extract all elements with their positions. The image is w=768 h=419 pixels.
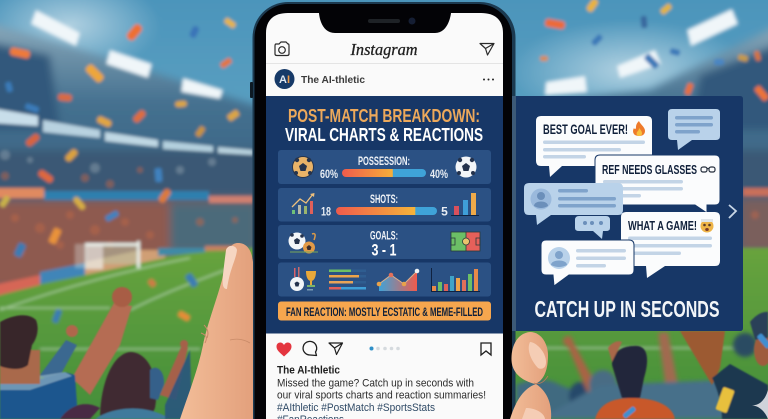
instagram header (275, 40, 494, 59)
caption: Missed the game? Catch up in seconds with (277, 378, 474, 390)
bubble: best goal: BEST GOAL EVER! (543, 122, 628, 137)
mini bars (329, 270, 366, 290)
screen (266, 13, 503, 419)
icon: balls (288, 232, 318, 254)
row: shots: 18 (321, 204, 331, 218)
phone body (252, 2, 516, 419)
notch (319, 13, 451, 33)
caption (277, 364, 486, 419)
icon: mind blown emoji (700, 219, 714, 232)
floodlights (31, 9, 738, 99)
post actions (276, 341, 491, 356)
column chart (431, 268, 480, 292)
icon: bookmark (481, 343, 491, 355)
bubble: what a game (621, 212, 720, 278)
caption: #AIthletic #PostMatch #SportsStats (277, 402, 435, 414)
phone (250, 2, 516, 419)
row: possession: POSSESSION: (358, 156, 410, 168)
bubble: typing (575, 216, 610, 239)
carousel dots (370, 346, 400, 350)
row: shots (278, 188, 491, 222)
callout: fan reaction: FAN REACTION: MOSTLY ECSTATIC & MEME-FILLED (286, 307, 483, 319)
bubble: ref needs glasses: REF NEEDS GLASSES (602, 162, 697, 177)
bubble: best goal (536, 116, 652, 177)
row: goals (278, 225, 491, 260)
row: shots: SHOTS: (370, 194, 398, 206)
row: goals: GOALS: (370, 230, 398, 242)
icon: camera (275, 42, 289, 56)
bubble: top right (668, 109, 720, 150)
row: possession: 40% (430, 167, 448, 181)
row: shots: 5 (441, 204, 448, 218)
icon: flame (633, 121, 645, 136)
icon: heart (276, 342, 292, 356)
icon: orange ball (292, 156, 314, 178)
area chart (377, 269, 419, 291)
more dots (483, 78, 494, 80)
icon: share (329, 343, 342, 354)
confetti (0, 0, 768, 324)
icon: pitch (451, 232, 480, 251)
caption: The AI-thletic (277, 364, 340, 376)
icon: white ball (456, 156, 476, 178)
avatar (274, 69, 294, 89)
icon: comment (303, 341, 317, 356)
carousel panel: catch up (512, 96, 743, 331)
icon: growth chart (292, 193, 314, 214)
caption: our viral sports charts and reaction summaries! (277, 390, 486, 402)
icon: glasses (701, 167, 715, 172)
icon: bar chart (451, 193, 479, 216)
row: possession: 60% (320, 167, 338, 181)
row: chart summary (278, 262, 491, 296)
hand: fingers (510, 332, 551, 419)
crowd speckle (1, 167, 759, 257)
title (285, 105, 483, 145)
account name: The AI-thletic (301, 75, 365, 86)
avatar (530, 188, 552, 210)
icon: sparkle watermark (752, 390, 768, 419)
arrow: next (729, 205, 736, 218)
crowd fans left (0, 287, 192, 419)
wordmark: Instagram (350, 40, 418, 59)
profile row (274, 69, 494, 89)
bubble: avatar message two (541, 240, 634, 286)
panel: post breakdown (266, 96, 503, 334)
title: VIRAL CHARTS & REACTIONS (285, 124, 483, 145)
bubble: avatar message (524, 183, 623, 225)
row: possession (278, 150, 491, 184)
callout: fan reaction (278, 302, 491, 320)
bubble: what a game: WHAT A GAME! (628, 218, 697, 233)
avatar (548, 247, 570, 269)
bubble: ref needs glasses (595, 155, 720, 213)
hand: thumb (180, 243, 253, 419)
profile row: AI (279, 74, 290, 86)
title: POST-MATCH BREAKDOWN: (288, 105, 480, 126)
icon: send (480, 44, 494, 55)
row: goals: 3 - 1 (372, 240, 396, 260)
icon: ball and trophy (290, 267, 316, 291)
crowd fans right (516, 332, 757, 419)
